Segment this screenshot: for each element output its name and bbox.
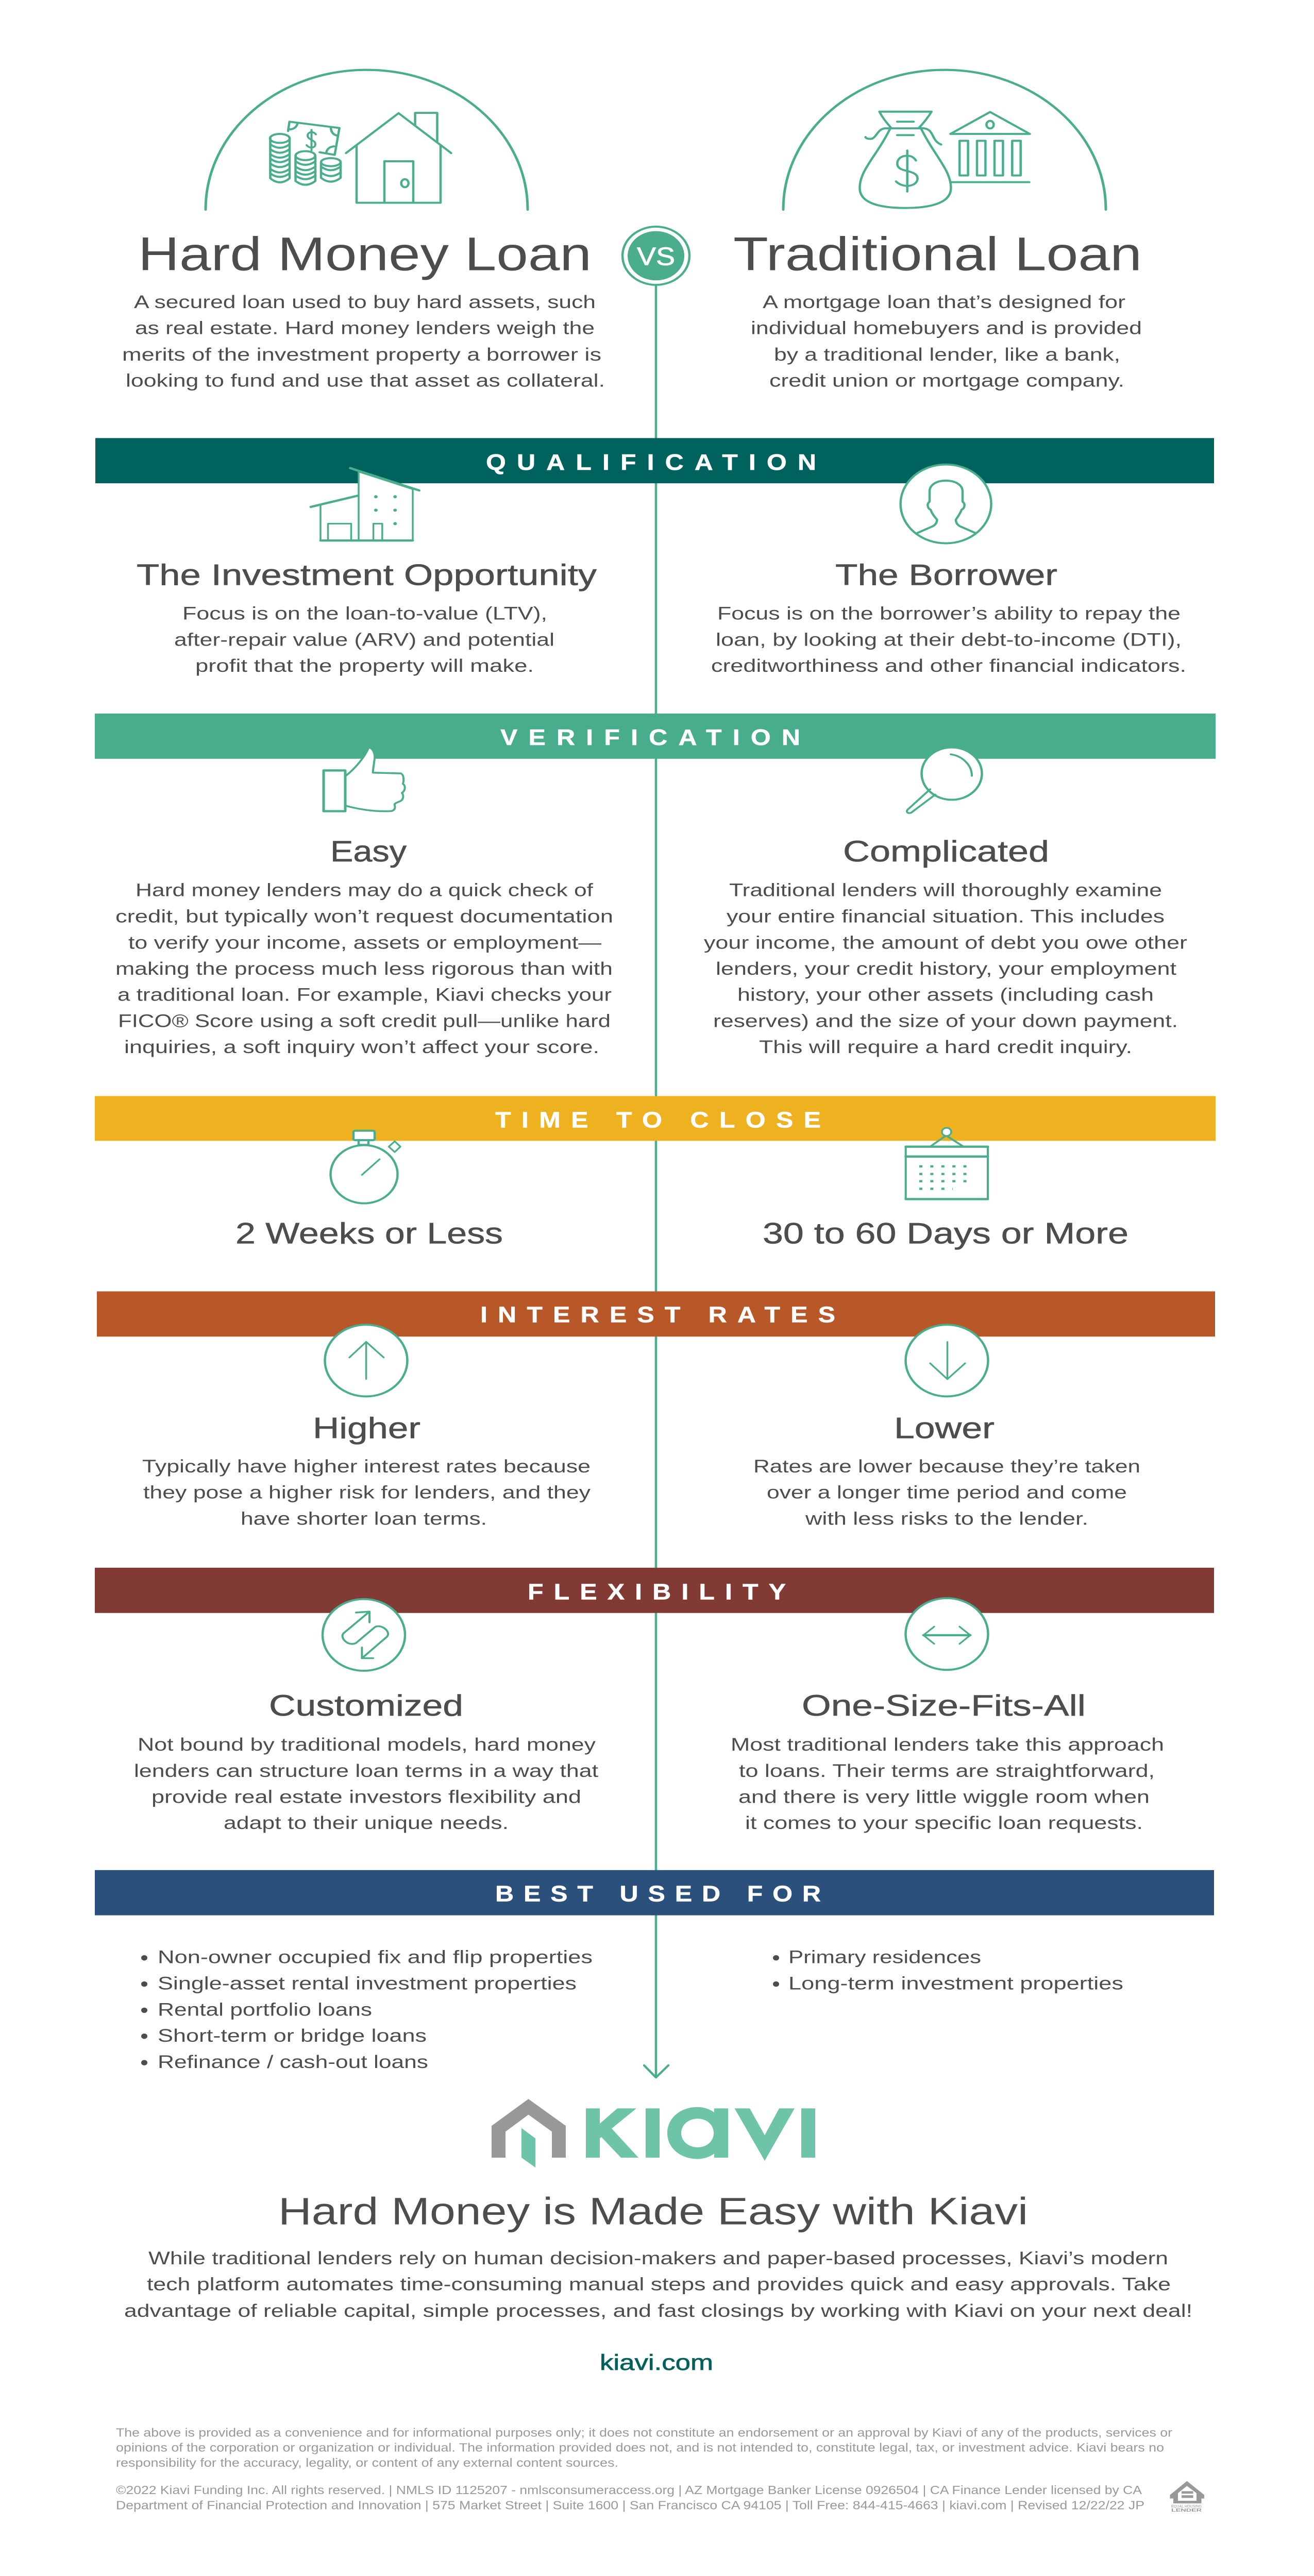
text: customized description: Not bound by traditional models, hard money <box>138 1735 596 1755</box>
panel: flexibility <box>95 1568 1214 1833</box>
text: borrower description <box>711 603 1186 676</box>
banner: verification <box>95 714 1216 759</box>
text: easy description: a traditional loan. For example, Kiavi checks your <box>117 985 612 1005</box>
VS badge <box>622 227 689 285</box>
text: one-size-fits-all description: Most traditional lenders take this approach <box>731 1735 1164 1755</box>
text: customized description: adapt to their unique needs. <box>224 1812 509 1833</box>
text: traditional description: by a traditional lender, like a bank, <box>774 344 1120 365</box>
text: investment opportunity description <box>174 603 554 676</box>
panel: verification <box>95 714 1216 1057</box>
icon: building <box>311 468 419 540</box>
icon: stopwatch <box>331 1131 400 1204</box>
text: closing paragraph: While traditional lenders rely on human decision-makers and paper-based processes, Kiavi’s modern <box>148 2248 1168 2268</box>
heading: higher: Higher <box>313 1412 420 1445</box>
text: complicated description: reserves) and the size of your down payment. <box>713 1011 1178 1031</box>
panel: interest rates <box>97 1292 1215 1529</box>
banner: qualification <box>95 438 1214 483</box>
text: lower description <box>753 1456 1140 1529</box>
banner: qualification: QUALIFICATION <box>486 450 816 474</box>
text: complicated description: your income, the amount of debt you owe other <box>704 933 1187 953</box>
text: higher description: they pose a higher risk for lenders, and they <box>143 1482 591 1503</box>
text: one-size-fits-all description: and there is very little wiggle room when <box>738 1787 1150 1807</box>
text: complicated description: your entire financial situation. This includes <box>727 906 1165 927</box>
panel: closing message <box>124 2190 1192 2375</box>
list: hard money uses: Non-owner occupied fix and flip properties <box>158 1947 593 1968</box>
text: complicated description <box>704 880 1187 1057</box>
banner: flexibility: FLEXIBILITY <box>528 1580 786 1604</box>
panel: header comparison <box>122 70 1142 391</box>
link: kiavi.com: kiavi.com <box>600 2350 713 2375</box>
text: investment opportunity description: Focus is on the loan-to-value (LTV), <box>182 603 547 624</box>
banner: interest rates: INTEREST RATES <box>480 1302 835 1327</box>
icon: equal housing lender: EQUAL HOUSING <box>1171 2504 1202 2509</box>
heading: one-size-fits-all: One-Size-Fits-All <box>802 1689 1086 1722</box>
footer: licensing: ©2022 Kiavi Funding Inc. All rights reserved. | NMLS ID 1125207 - nmlsconsumeraccess.org | AZ Mortgage Banker License 0926504 | CA Finance Lender licensed by CA <box>116 2483 1142 2497</box>
icon: magnifying glass <box>907 748 982 813</box>
heading: 2 weeks or less: 2 Weeks or Less <box>235 1217 503 1250</box>
text: borrower description: Focus is on the borrower’s ability to repay the <box>717 603 1181 624</box>
banner: best used for: BEST USED FOR <box>495 1882 821 1906</box>
list: hard money uses: Refinance / cash-out loans <box>158 2052 428 2072</box>
panel: qualification <box>95 438 1214 676</box>
text: closing paragraph: tech platform automates time-consuming manual steps and provides quick and easy approvals. Take <box>147 2274 1171 2295</box>
icon: equal housing lender <box>1170 2481 1204 2513</box>
list: traditional uses: Primary residences <box>788 1947 981 1968</box>
icon: traditional arch with money bag and bank <box>783 70 1106 210</box>
text: higher description <box>142 1456 591 1529</box>
text: complicated description: lenders, your credit history, your employment <box>716 958 1176 979</box>
text: easy description: making the process much less rigorous than with <box>115 958 613 979</box>
icon: hard money arch with house, coins and bill <box>206 70 528 210</box>
heading: the borrower: The Borrower <box>835 558 1057 591</box>
icon: arrow down <box>906 1325 988 1396</box>
logo: kiavi <box>492 2099 815 2167</box>
text: customized description: lenders can structure loan terms in a way that <box>134 1760 598 1781</box>
list: hard money uses: Short-term or bridge loans <box>158 2025 427 2046</box>
heading: hard money is made easy with kiavi: Hard Money is Made Easy with Kiavi <box>278 2190 1028 2232</box>
footer: disclaimer: The above is provided as a convenience and for informational purposes only; it does not constitute an endorsement or an approval by Kiavi of any of the products, services or <box>116 2426 1172 2439</box>
icon: arrow up <box>325 1325 407 1396</box>
text: customized description: provide real estate investors flexibility and <box>151 1787 581 1807</box>
VS badge: VS <box>637 243 675 271</box>
footer: disclaimer <box>116 2426 1172 2469</box>
text: borrower description: creditworthiness and other financial indicators. <box>711 656 1186 676</box>
icon: equal housing lender: LENDER <box>1171 2507 1202 2513</box>
text: customized description <box>134 1735 598 1833</box>
text: easy description: to verify your income, assets or employment— <box>128 933 602 953</box>
text: investment opportunity description: after-repair value (ARV) and potential <box>174 630 554 650</box>
icon: thumbs up <box>324 748 405 811</box>
text: traditional description: credit union or mortgage company. <box>769 370 1124 391</box>
panel: time to close <box>95 1096 1216 1250</box>
text: one-size-fits-all description: it comes to your specific loan requests. <box>745 1812 1143 1833</box>
banner: best used for <box>95 1870 1214 1916</box>
icon: horizontal arrows <box>906 1598 988 1670</box>
banner: verification: VERIFICATION <box>500 725 800 750</box>
heading: the investment opportunity: The Investment Opportunity <box>137 558 597 591</box>
text: borrower description: loan, by looking at their debt-to-income (DTI), <box>716 630 1182 650</box>
text: traditional description: A mortgage loan that’s designed for <box>763 292 1125 313</box>
footer: licensing <box>116 2483 1144 2512</box>
heading: lower: Lower <box>894 1412 995 1445</box>
banner: time to close: TIME TO CLOSE <box>495 1107 821 1132</box>
list: traditional uses: Long-term investment properties <box>788 1973 1123 1994</box>
list: hard money uses <box>141 1947 593 2072</box>
text: one-size-fits-all description <box>731 1735 1164 1833</box>
text: easy description: credit, but typically won’t request documentation <box>115 906 613 927</box>
title: traditional loan: Traditional Loan <box>733 228 1142 281</box>
footer: licensing: Department of Financial Protection and Innovation | 575 Market Street | Suite 1600 | San Francisco CA 94105 | Toll Free: 844-415-4663 | kiavi.com | Revised 12/22/22 JP <box>116 2499 1144 2512</box>
heading: complicated: Complicated <box>843 835 1049 868</box>
list: traditional uses <box>773 1947 1123 1994</box>
text: closing paragraph <box>124 2248 1192 2321</box>
text: easy description: FICO® Score using a soft credit pull—unlike hard <box>118 1011 611 1031</box>
text: one-size-fits-all description: to loans. Their terms are straightforward, <box>739 1760 1155 1781</box>
text: easy description <box>115 880 613 1057</box>
banner: time to close <box>95 1096 1216 1141</box>
panel: best used for <box>95 1870 1214 2072</box>
list: hard money uses: Single-asset rental investment properties <box>158 1973 577 1994</box>
text: traditional description: individual homebuyers and is provided <box>751 318 1142 338</box>
title: hard money loan: Hard Money Loan <box>138 228 592 281</box>
text: lower description: Rates are lower because they’re taken <box>753 1456 1140 1477</box>
text: lower description: over a longer time period and come <box>767 1482 1127 1503</box>
footer: disclaimer: opinions of the corporation or organization or individual. The information provided does not, and is not intended to, constitute legal, tax, or investment advice. Kiavi bears no <box>116 2441 1164 2454</box>
text: hard money description: as real estate. Hard money lenders weigh the <box>135 318 595 338</box>
heading: customized: Customized <box>269 1689 463 1722</box>
text: hard money description: merits of the investment property a borrower is <box>122 344 601 365</box>
center divider arrow <box>644 282 668 2077</box>
footer: disclaimer: responsibility for the accuracy, legality, or content of any external content sources. <box>116 2456 618 2469</box>
list: hard money uses: Rental portfolio loans <box>158 1999 372 2020</box>
banner: interest rates <box>97 1292 1215 1336</box>
heading: 30 to 60 days or more: 30 to 60 Days or More <box>763 1217 1128 1250</box>
text: easy description: inquiries, a soft inquiry won’t affect your score. <box>124 1037 599 1057</box>
heading: easy: Easy <box>330 835 407 868</box>
text: hard money description <box>122 292 605 391</box>
text: traditional description <box>751 292 1142 391</box>
text: complicated description: Traditional lenders will thoroughly examine <box>729 880 1162 901</box>
icon: customized arrows <box>323 1599 405 1671</box>
banner: flexibility <box>95 1568 1214 1613</box>
text: hard money description: looking to fund and use that asset as collateral. <box>126 370 605 391</box>
icon: person <box>901 465 991 544</box>
text: higher description: Typically have higher interest rates because <box>142 1456 591 1477</box>
text: hard money description: A secured loan used to buy hard assets, such <box>134 292 596 313</box>
text: complicated description: history, your other assets (including cash <box>737 985 1154 1005</box>
text: complicated description: This will require a hard credit inquiry. <box>759 1037 1132 1057</box>
text: easy description: Hard money lenders may do a quick check of <box>136 880 593 901</box>
text: higher description: have shorter loan terms. <box>241 1509 487 1529</box>
text: closing paragraph: advantage of reliable capital, simple processes, and fast closings by working with Kiavi on your next deal! <box>124 2300 1192 2321</box>
text: investment opportunity description: profit that the property will make. <box>195 656 534 676</box>
icon: calendar <box>906 1128 988 1199</box>
text: lower description: with less risks to the lender. <box>805 1509 1088 1529</box>
